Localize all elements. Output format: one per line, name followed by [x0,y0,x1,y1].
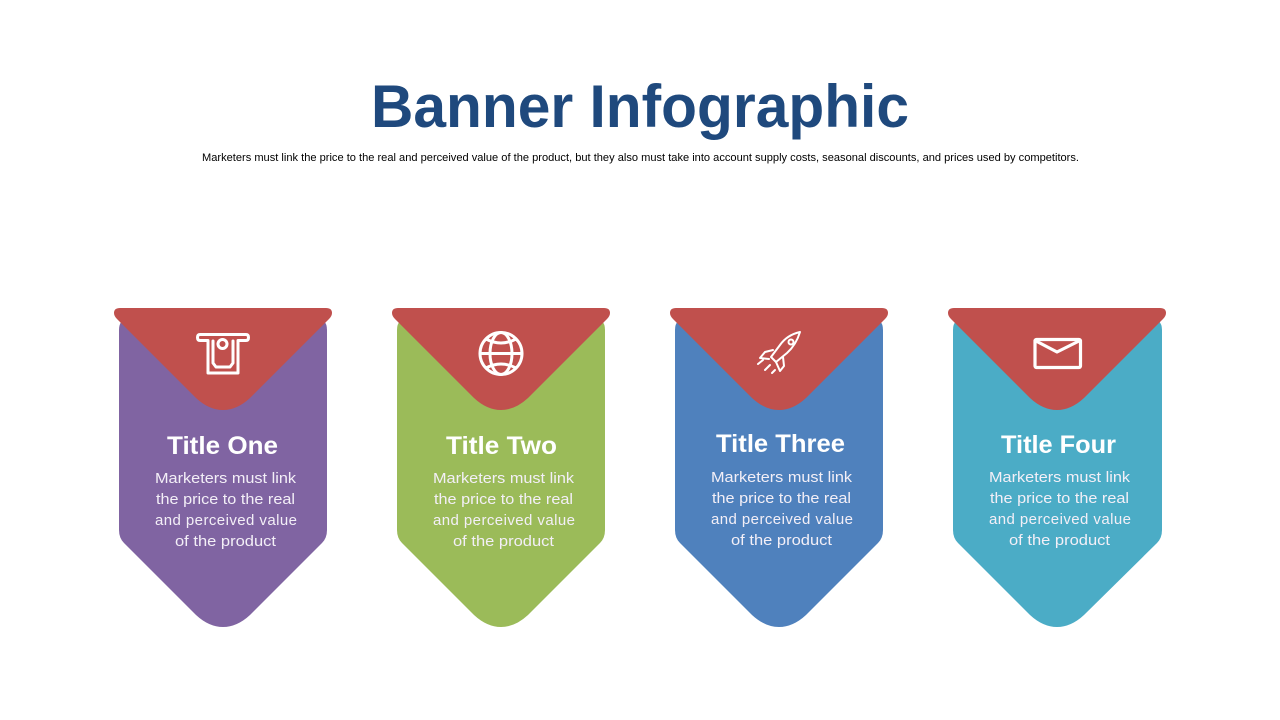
banner body: blue [675,318,883,627]
description text: and perceived value [989,511,1131,528]
description text: Marketers must link [989,469,1131,486]
heading: title one: Title One [167,432,278,460]
description text [711,469,853,549]
icon: rocket [758,332,800,373]
description text: the price to the real [434,491,573,508]
description text: Marketers must link [711,469,853,486]
red triangle cap [670,308,888,410]
icon: globe [480,332,522,374]
icon: envelope [1035,340,1080,368]
heading: title four: Title Four [1001,431,1116,459]
panel: title four [948,308,1166,627]
heading: title two: Title Two [446,432,557,460]
icon: atm cash slot [198,334,248,373]
description text: the price to the real [156,491,295,508]
description text: and perceived value [155,512,297,529]
description text [155,470,297,550]
description text: of the product [731,532,833,549]
banner body: green [397,318,605,627]
panel: title two [392,308,610,627]
heading: title three: Title Three [716,430,845,458]
description text: and perceived value [433,512,575,529]
title: Banner Infographic [371,73,909,140]
description text: the price to the real [712,490,851,507]
description text [433,470,575,550]
banner body: teal [953,318,1162,627]
description text: of the product [175,533,277,550]
description text: and perceived value [711,511,853,528]
description text: of the product [453,533,555,550]
description text: Marketers must link [433,470,575,487]
description text [989,469,1131,549]
red triangle cap [948,308,1166,410]
red triangle cap [114,308,332,410]
red triangle cap [392,308,610,410]
panel: title three [670,308,888,627]
banner body: purple [119,318,327,627]
description text: Marketers must link [155,470,297,487]
description text: the price to the real [990,490,1129,507]
panel: title one [114,308,332,627]
subtitle text: Marketers must link the price to the real and perceived value of the product, but they also must take into account supply costs, seasonal discounts, and prices used by competitors. [202,152,1079,164]
description text: of the product [1009,532,1111,549]
